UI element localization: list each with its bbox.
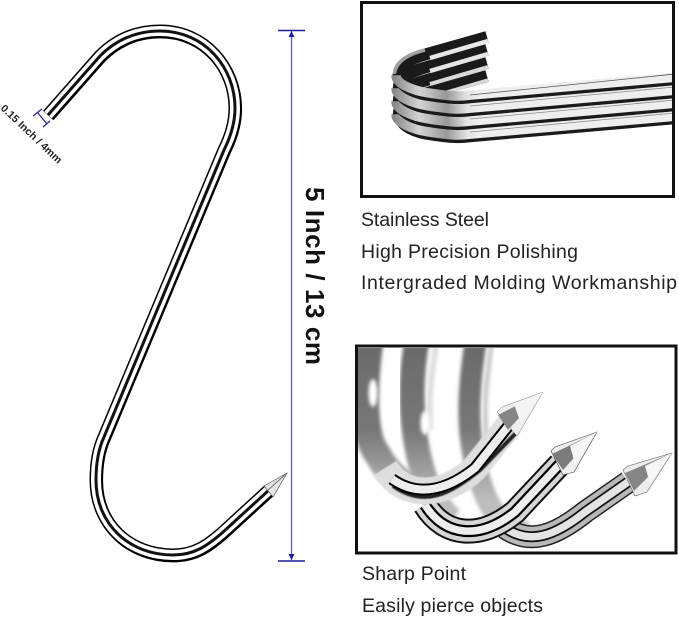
text: stainless steel features: Stainless Steel [361, 209, 489, 231]
S-hook illustration [48, 31, 287, 556]
text: sharp point features: Easily pierce objects [362, 595, 543, 617]
middle hook B [412, 340, 597, 531]
lower arms of hooks [396, 74, 675, 137]
height label: 5 Inch / 13 cm [300, 187, 330, 365]
text: sharp point features: Sharp Point [362, 563, 467, 585]
text: stainless steel features: High Precision Polishing [361, 241, 578, 263]
upper arms of hooks [394, 37, 488, 113]
back hook C [469, 340, 672, 537]
panel: sharp points close-up [356, 340, 676, 553]
text: stainless steel features: Intergraded Molding Workmanship [361, 272, 677, 294]
text: sharp point features [362, 563, 543, 617]
panel: stainless steel close-up [362, 2, 675, 196]
text: stainless steel features [361, 209, 677, 294]
height dimension line [278, 30, 305, 561]
front hook A [366, 340, 543, 497]
